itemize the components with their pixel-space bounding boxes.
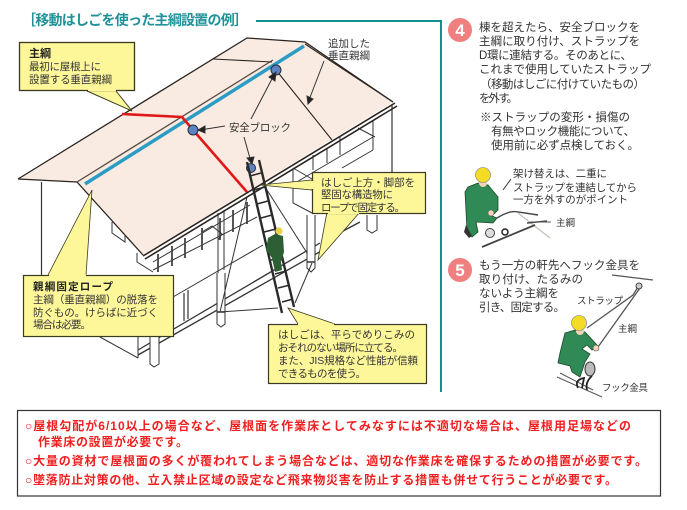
teal frame line — [256, 21, 441, 392]
step 4 text — [479, 20, 652, 105]
step 4 text: 主綱に取り付け、ストラップを — [479, 35, 640, 48]
warning box: ○墜落防止対策の他、立入禁止区域の設定など飛来物災害を防止する措置も併せて行うことが必要です。 — [25, 472, 617, 487]
leader arrows — [198, 61, 324, 164]
callout: anchor rope: 親綱固定ロープ — [33, 280, 114, 293]
callout: ladder placement: できるものを使う。 — [278, 367, 366, 380]
callout: main rope — [20, 42, 134, 111]
callout: main rope: 主綱 — [29, 46, 51, 60]
icon: worker changing strap — [464, 168, 550, 247]
step 5 text: もう一方の軒先へフック金具を — [479, 258, 640, 272]
callout: anchor rope: 場合は必要。 — [33, 318, 91, 331]
step 4 note: 有無やロック機能について、 — [491, 124, 635, 138]
label: main rope — [530, 221, 551, 223]
step 4 text: これまで使用していたストラップ — [479, 62, 652, 76]
step 5 text: ないよう主綱を — [479, 287, 559, 300]
callout: ladder placement: はしごは、平らでめりこみの — [278, 328, 415, 341]
label: main rope text: 主綱 — [556, 217, 575, 229]
step 4 text: を外す。 — [479, 92, 518, 105]
callout: fix ladder with rope: 堅固な構造物に — [321, 188, 393, 201]
step 4 note — [480, 110, 639, 152]
label: safety block: 安全ブロック — [229, 121, 291, 134]
step 5 text — [479, 258, 640, 314]
safety blocks — [188, 65, 281, 172]
callout: ladder placement: おそれのない場所に立てる。 — [278, 341, 403, 354]
callout: main rope: 設置する垂直親綱 — [29, 73, 112, 86]
callout: anchor rope: 防ぐもの。けらばに近づく — [33, 306, 158, 319]
callout: main rope: 最初に屋根上に — [29, 60, 101, 73]
step 4 note: 使用前に必ず点検しておく。 — [491, 138, 639, 152]
main rope (red) — [122, 114, 247, 192]
strap note: 架け替えは、二重に — [513, 167, 607, 180]
worker on ladder — [266, 227, 284, 272]
callout: anchor rope — [24, 190, 174, 336]
label: added vertical lifeline: 垂直親綱 — [328, 49, 370, 62]
callout: fix ladder with rope: ロープで固定する。 — [321, 202, 405, 214]
step 4 text: D環に連結する。そのあとに、 — [479, 48, 632, 62]
strap note: ストラップを連結してから — [513, 181, 637, 194]
step 5 badge: 5 — [455, 261, 465, 280]
step 4 text: （移動はしごに付けていたもの） — [480, 77, 645, 91]
strap note — [513, 167, 637, 206]
ladder — [247, 160, 294, 313]
step 4 badge — [448, 18, 472, 42]
house walls and posts — [42, 105, 392, 367]
warning lines: ○屋根勾配が6/10以上の場合など、屋根面を作業床としてみなすには不適切な場合は、屋根用足場などの — [25, 418, 631, 433]
step 5 text: 取り付け、たるみの — [479, 273, 583, 286]
house illustration — [18, 38, 397, 367]
label: strap: ストラップ — [577, 296, 623, 307]
warning box: 作業床の設置が必要です。 — [38, 434, 188, 449]
callout: anchor rope: 主綱（垂直親綱）の脱落を — [33, 293, 158, 306]
roof — [18, 38, 397, 259]
step 4 badge: 4 — [455, 21, 465, 40]
label: hook fitting: フック金具 — [602, 382, 648, 394]
label: added vertical lifeline — [328, 37, 370, 62]
title: ［移動はしごを使った主綱設置の例］ — [22, 12, 248, 28]
callout: fix ladder with rope: はしご上方・脚部を — [321, 176, 415, 189]
step 5 badge — [448, 258, 472, 282]
callout: fix ladder with rope — [260, 172, 426, 260]
label: added vertical lifeline: 追加した — [328, 37, 370, 50]
icon: worker fixing hook — [557, 275, 653, 397]
warning box — [18, 410, 660, 496]
step 5 text: 引き、固定する。 — [479, 300, 565, 314]
callout: ladder placement: また、JIS規格など性能が信頼 — [278, 354, 418, 367]
strap note: 一方を外すのがポイント — [513, 193, 628, 206]
step 4 text: 棟を超えたら、安全ブロックを — [479, 20, 640, 34]
label: main rope: 主綱 — [618, 323, 637, 335]
step 4 note: ※ストラップの変形・損傷の — [480, 110, 630, 124]
warning box: ○大量の資材で屋根面の多くが覆われてしまう場合などは、適切な作業床を確保するための措置が必要です。 — [25, 453, 647, 468]
main rope on ridge (blue) — [85, 46, 304, 184]
callout: ladder placement — [268, 308, 426, 384]
vertical lifelines — [213, 44, 393, 140]
